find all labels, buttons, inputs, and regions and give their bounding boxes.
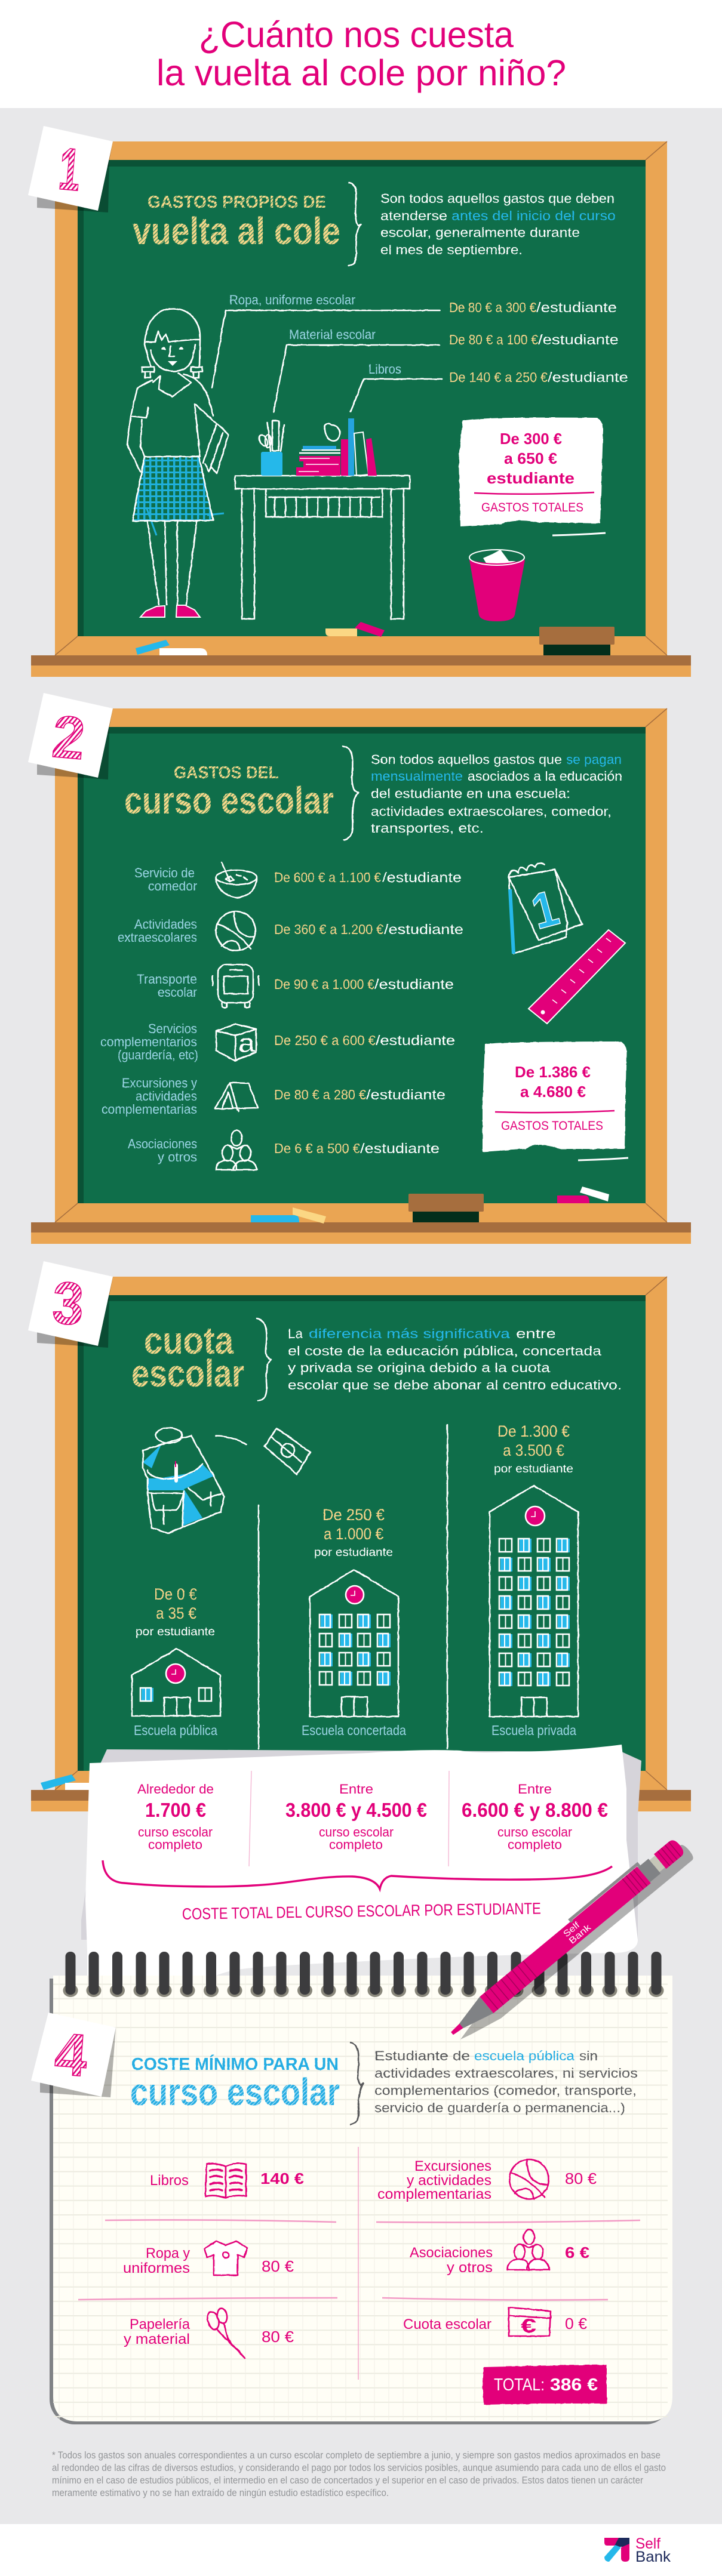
callouts: item costs: /estudiante	[538, 332, 619, 347]
brace	[349, 183, 361, 266]
text block: intro 3: escolar que se debe abonar al centro educativo.	[288, 1378, 622, 1392]
icon: people	[216, 1130, 257, 1170]
text block: intro 2: Son todos aquellos gastos que	[371, 752, 562, 767]
heading: cuota escolar: cuota	[144, 1319, 234, 1362]
logo: Self Bank	[604, 2535, 671, 2565]
column: escuela concertada: De 250 €	[322, 1506, 385, 1524]
note: number 4: 4	[53, 2020, 90, 2090]
text block: intro 1: atenderse	[380, 208, 447, 223]
illustration: waste bin	[469, 550, 525, 621]
list: course costs: actividades	[136, 1089, 197, 1104]
icon: bus	[213, 965, 259, 1007]
title	[156, 14, 566, 93]
row: ropa: uniformes	[123, 2260, 190, 2276]
totals: publica	[137, 1782, 214, 1852]
heading: gastos del curso escolar	[124, 763, 334, 822]
brace	[257, 1318, 271, 1401]
totals: privada	[462, 1782, 608, 1852]
list: course costs: /estudiante	[376, 1033, 455, 1048]
text block: intro 3: La	[288, 1326, 303, 1341]
note: number 3	[28, 1261, 113, 1348]
column: escuela concertada: Escuela concertada	[302, 1723, 406, 1738]
callouts: item costs: De 80 € a 300 €	[449, 300, 536, 315]
list: course costs: Asociaciones	[128, 1136, 197, 1151]
text block: intro 2: se pagan	[566, 752, 622, 767]
callout: total 386: 386 €	[550, 2375, 598, 2395]
totals: concertada: 3.800 € y 4.500 €	[285, 1799, 427, 1821]
row: asociaciones: Asociaciones	[410, 2245, 493, 2261]
list: course costs	[100, 865, 463, 1164]
column: escuela publica: Escuela pública	[134, 1723, 217, 1738]
row: ropa	[123, 2241, 294, 2276]
row: asociaciones: y otros	[447, 2260, 493, 2276]
list: course costs: complementarias	[102, 1102, 197, 1117]
column: escuela concertada: por estudiante	[314, 1546, 393, 1559]
column: escuela privada: por estudiante	[494, 1463, 573, 1475]
column: escuela concertada	[302, 1506, 406, 1738]
text block: intro 4: sin	[579, 2048, 598, 2063]
heading: cuota escolar	[131, 1319, 244, 1395]
heading: gastos propios de vuelta al cole: GASTOS PROPIOS DE	[148, 193, 326, 212]
callout: total 2: a 4.680 €	[520, 1083, 586, 1101]
totals: concertada: curso escolar	[319, 1825, 394, 1839]
text block: intro 3: el coste de la educación pública, concertada	[288, 1344, 602, 1358]
list: course costs: De 80 € a 280 €	[274, 1087, 366, 1102]
text block: intro 4: escuela pública	[474, 2048, 575, 2063]
text block: intro 1: escolar, generalmente durante	[380, 225, 580, 240]
text block: intro 2	[371, 752, 622, 836]
column: escuela privada: De 1.300 €	[497, 1422, 570, 1440]
icon: basketball	[216, 911, 256, 951]
totals: publica: Alrededor de	[137, 1782, 214, 1797]
text block: intro 3	[288, 1326, 622, 1392]
chalks and eraser 1	[136, 622, 615, 655]
list: course costs: De 360 € a 1.200 €	[274, 922, 383, 937]
big brace	[103, 1860, 612, 1889]
row: excursiones: 80 €	[565, 2170, 597, 2187]
text block: intro 4	[374, 2048, 638, 2115]
panel: notebook	[50, 1976, 672, 2424]
illustration: calendar: 1	[526, 879, 564, 940]
notebook spiral	[63, 1952, 664, 1997]
illustration: calendar	[509, 863, 582, 954]
footnote	[52, 2449, 666, 2498]
column: escuela privada	[490, 1422, 578, 1738]
callout: total 1	[459, 418, 606, 535]
panel: paper sheet with totals	[81, 1745, 641, 1976]
callout: total 1: De 300 €	[500, 430, 562, 448]
heading: coste minimo	[130, 2054, 340, 2113]
panel: chalkboard 1	[31, 141, 691, 677]
text block: intro 1	[380, 191, 616, 257]
callouts: item costs	[229, 292, 628, 385]
separator	[105, 2220, 640, 2223]
note: number 2: 2	[50, 703, 88, 772]
row: cuota escolar: 0 €	[565, 2315, 588, 2332]
illustration: pen	[444, 1835, 695, 2047]
logo: Self Bank: Self	[635, 2535, 660, 2552]
row: cuota escolar	[403, 2307, 588, 2337]
heading: coste minimo: curso escolar	[130, 2070, 340, 2113]
column dividers	[249, 1771, 449, 1866]
text block: intro 4: actividades extraescolares, ni servicios	[374, 2066, 638, 2081]
callouts: item costs: Libros	[368, 362, 401, 377]
heading: cuota escolar: escolar	[131, 1352, 244, 1395]
callouts: item costs: Material escolar	[289, 327, 376, 342]
column: escuela privada: a 3.500 €	[503, 1441, 564, 1459]
panel: chalkboard 3	[31, 1277, 691, 1811]
footnote: * Todos los gastos son anuales correspondientes a un curso escolar completo de septiembre a junio, y siempre son gastos medios aproximados en base	[52, 2449, 660, 2461]
text block: intro 3: y privada se origina debido a la cuota	[288, 1360, 551, 1375]
footer band	[0, 2524, 722, 2576]
list: course costs: De 250 € a 600 €	[274, 1033, 376, 1048]
callout: total 1: a 650 €	[504, 449, 557, 467]
illustration: banknote	[216, 1428, 311, 1474]
text block: intro 2: del estudiante en una escuela:	[371, 786, 570, 801]
list: course costs: comedor	[148, 879, 197, 893]
callout: total 386	[483, 2365, 607, 2405]
totals: concertada: Entre	[339, 1782, 373, 1797]
text block: intro 2: transportes, etc.	[371, 821, 484, 836]
list: course costs: y otros	[158, 1150, 197, 1164]
text block: intro 4: complementarios (comedor, transporte,	[374, 2083, 637, 2098]
note: number 1: 1	[56, 135, 84, 204]
icon: tent	[215, 1083, 258, 1111]
callout: total 2: De 1.386 €	[515, 1063, 591, 1081]
totals: concertada: completo	[329, 1837, 383, 1852]
separator	[78, 2298, 608, 2300]
row: libros: 140 €	[260, 2170, 304, 2187]
row: ropa: 80 €	[262, 2257, 294, 2275]
center divider	[358, 2147, 359, 2380]
row: cuota escolar: €	[521, 2315, 536, 2337]
text block: intro 3: diferencia más significativa	[309, 1326, 511, 1341]
row: cuota escolar: Cuota escolar	[403, 2316, 491, 2332]
totals: publica: completo	[148, 1837, 202, 1852]
brace	[350, 2042, 364, 2125]
label: coste total: COSTE TOTAL DEL CURSO ESCOLAR POR ESTUDIANTE	[182, 1900, 541, 1923]
totals: privada: completo	[508, 1837, 562, 1852]
illustration: pen: Self	[561, 1919, 582, 1939]
text block: intro 3: entre	[516, 1326, 556, 1341]
note: number 1	[28, 126, 113, 212]
brace	[343, 746, 358, 840]
callouts: item costs: Ropa, uniforme escolar	[229, 292, 355, 307]
column: escuela publica: por estudiante	[136, 1626, 215, 1638]
callouts: item costs: De 80 € a 100 €	[449, 332, 538, 347]
panel: chalkboard 2	[31, 708, 691, 1244]
totals: privada: 6.600 € y 8.800 €	[462, 1799, 608, 1821]
heading: gastos propios de vuelta al cole: vuelta al cole	[133, 209, 340, 252]
list: course costs: /estudiante	[374, 976, 454, 992]
heading: gastos del curso escolar: curso escolar	[124, 779, 334, 822]
list: course costs: De 90 € a 1.000 €	[274, 976, 374, 992]
logo: Self Bank: Bank	[635, 2549, 671, 2565]
list: course costs: /estudiante	[366, 1087, 446, 1102]
illustration: pencil pot and books	[257, 418, 377, 476]
dividers	[259, 1425, 447, 1749]
totals: publica: 1.700 €	[145, 1799, 206, 1821]
list: course costs: extraescolares	[118, 930, 197, 945]
row: asociaciones: 6 €	[565, 2244, 589, 2261]
callouts: item costs: /estudiante	[548, 369, 628, 385]
row: ropa: Ropa y	[146, 2245, 190, 2261]
totals: privada: Entre	[518, 1782, 552, 1797]
totals: concertada	[285, 1782, 427, 1852]
header band	[0, 0, 722, 108]
text block: intro 1: Son todos aquellos gastos que deben	[380, 191, 615, 206]
list: course costs: /estudiante	[382, 870, 462, 885]
list: course costs: De 600 € a 1.100 €	[274, 870, 381, 885]
row: libros: Libros	[150, 2173, 189, 2189]
row: excursiones: complementarias	[377, 2186, 491, 2202]
totals: publica: curso escolar	[138, 1825, 213, 1839]
title: la vuelta al cole por niño?	[156, 53, 566, 93]
text block: intro 2: mensualmente	[371, 769, 463, 784]
list: course costs: complementarios	[100, 1034, 197, 1049]
row: excursiones	[377, 2158, 597, 2202]
list: course costs: Actividades	[134, 917, 197, 932]
list: course costs: (guardería, etc)	[118, 1047, 198, 1062]
text block: intro 4: Estudiante de	[374, 2048, 470, 2063]
illustration: backpack	[143, 1428, 224, 1533]
list: course costs: De 6 € a 500 €	[274, 1141, 360, 1156]
chalks and eraser 2	[251, 1187, 609, 1224]
note: number 2	[28, 693, 113, 779]
callouts: item costs: De 140 € a 250 €	[449, 369, 548, 385]
text block: intro 2: asociados a la educación	[468, 769, 622, 784]
totals: privada: curso escolar	[497, 1825, 572, 1839]
footnote: meramente estimativo y no se han extraído de ningún estudio estadístico específico.	[52, 2487, 389, 2498]
callout: total 2	[483, 1042, 628, 1160]
row: papeleria: 80 €	[262, 2328, 294, 2346]
note: number 4	[31, 2013, 116, 2097]
illustration: girl	[127, 309, 229, 617]
callout: total 1: estudiante	[487, 469, 574, 487]
icon: bowl	[216, 862, 257, 898]
list: course costs: /estudiante	[384, 922, 463, 937]
row: papeleria: Papelería	[130, 2316, 191, 2332]
leader lines	[212, 310, 442, 412]
row: excursiones: y actividades	[407, 2173, 491, 2189]
footnote: mínimo en el caso de estudios públicos, el intermedio en el caso de concertados y el superior en el caso de privados. Estos datos tienen un carácter	[52, 2475, 643, 2486]
text block: intro 2: actividades extraescolares, comedor,	[371, 804, 612, 819]
list: course costs: Transporte	[137, 972, 197, 987]
column: escuela privada: Escuela privada	[491, 1723, 576, 1738]
callout: total 1: GASTOS TOTALES	[481, 501, 583, 514]
illustration: ruler	[529, 930, 625, 1024]
note: number 3: 3	[51, 1269, 85, 1338]
column: escuela publica: a 35 €	[156, 1604, 196, 1622]
heading: coste minimo: COSTE MÍNIMO PARA UN	[131, 2054, 339, 2074]
text block: intro 4: servicio de guardería o permanencia...)	[374, 2100, 625, 2115]
list: course costs: Servicios	[148, 1021, 197, 1036]
column: escuela publica: De 0 €	[154, 1585, 197, 1603]
callout: total 2: GASTOS TOTALES	[501, 1119, 603, 1133]
list: course costs: /estudiante	[360, 1141, 440, 1156]
illustration: pen: Bank	[567, 1922, 593, 1946]
list: course costs: Excursiones y	[122, 1076, 197, 1090]
column: escuela concertada: a 1.000 €	[324, 1525, 383, 1543]
heading: gastos del curso escolar: GASTOS DEL	[174, 763, 278, 782]
row: papeleria	[124, 2307, 294, 2358]
callout: total 386: TOTAL:	[494, 2375, 545, 2395]
callouts: item costs: /estudiante	[536, 300, 617, 315]
heading: gastos propios de vuelta al cole	[133, 193, 340, 252]
illustration: desk	[235, 476, 410, 619]
text block: intro 1: el mes de septiembre.	[380, 242, 523, 257]
list: course costs: Servicio de	[134, 865, 195, 880]
list: course costs: escolar	[158, 985, 197, 1000]
chalks 3	[41, 1774, 90, 1790]
icon: alphabet block: a	[238, 1029, 256, 1057]
row: libros	[150, 2164, 304, 2198]
column: escuela publica	[132, 1585, 220, 1738]
title: ¿Cuánto nos cuesta	[199, 14, 514, 55]
text block: intro 1: antes del inicio del curso	[451, 208, 616, 223]
row: excursiones: Excursiones	[414, 2158, 491, 2174]
row: papeleria: y material	[124, 2331, 190, 2347]
icon: alphabet block	[216, 1024, 256, 1061]
row: asociaciones	[410, 2229, 589, 2276]
